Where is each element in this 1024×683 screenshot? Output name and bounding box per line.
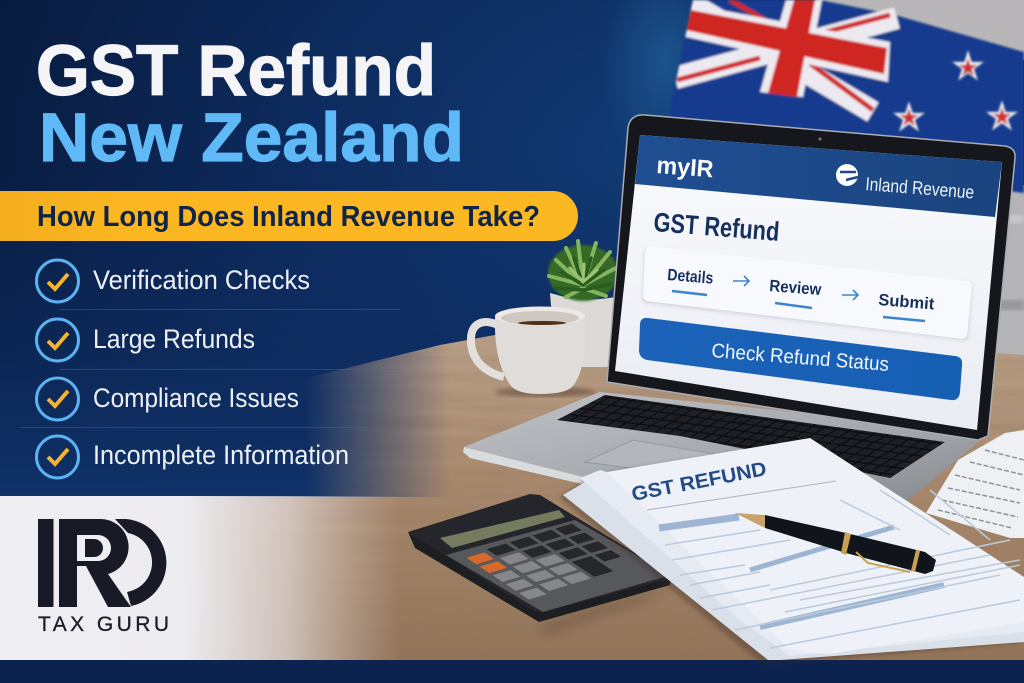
check refund status button — [639, 318, 962, 400]
logo: IRD Tax Guru — [38, 519, 169, 636]
keyboard — [557, 395, 945, 478]
grey wall — [815, 0, 1024, 365]
calculator — [408, 494, 671, 632]
step card: Review — [769, 277, 822, 299]
laptop — [463, 115, 1015, 508]
paper form — [647, 481, 1020, 648]
item: incomplete information — [36, 436, 349, 478]
screen header bar: myIR — [656, 152, 714, 183]
item: compliance issues — [36, 378, 299, 420]
coffee mug — [471, 306, 595, 397]
item: large refunds: Large Refunds — [93, 324, 255, 354]
calculator screen — [440, 510, 565, 548]
icon: Inland Revenue logo — [836, 164, 858, 186]
plant — [548, 241, 620, 367]
pen — [735, 513, 936, 574]
item: verification checks — [36, 260, 310, 302]
screen heading: GST Refund — [653, 207, 780, 247]
step card — [643, 246, 972, 340]
logo panel background — [0, 496, 400, 660]
bottom band — [0, 660, 1024, 683]
item: compliance issues: Compliance Issues — [93, 383, 299, 413]
webcam — [818, 138, 822, 140]
calculator keys — [464, 524, 637, 600]
flag stars — [893, 50, 1018, 132]
receipts — [926, 430, 1024, 538]
title: GST Refund — [36, 32, 436, 111]
arrow — [842, 290, 858, 300]
screen — [615, 135, 1002, 430]
screen header bar — [635, 135, 1002, 217]
paper heading: GST REFUND — [630, 458, 768, 506]
item: large refunds — [36, 319, 255, 361]
arrow — [733, 276, 749, 286]
laptop base — [463, 392, 990, 508]
screen header bar: Inland Revenue — [865, 173, 975, 203]
paper stack — [559, 438, 1024, 663]
check refund status button: Check Refund Status — [711, 340, 890, 376]
New Zealand flag — [670, 0, 1024, 193]
item: incomplete information: Incomplete Information — [93, 440, 349, 470]
logo: IRD Tax Guru: TAX GURU — [38, 613, 169, 636]
subtitle banner — [0, 191, 578, 241]
item: verification checks: Verification Checks — [93, 265, 310, 295]
title — [36, 32, 464, 176]
subtitle banner: How Long Does Inland Revenue Take? — [37, 201, 540, 233]
title: New Zealand — [39, 99, 464, 176]
checklist — [20, 260, 400, 478]
wooden desk — [202, 335, 1024, 660]
screen bezel — [607, 115, 1015, 440]
step card: Details — [667, 266, 714, 288]
step card: Submit — [878, 291, 935, 313]
